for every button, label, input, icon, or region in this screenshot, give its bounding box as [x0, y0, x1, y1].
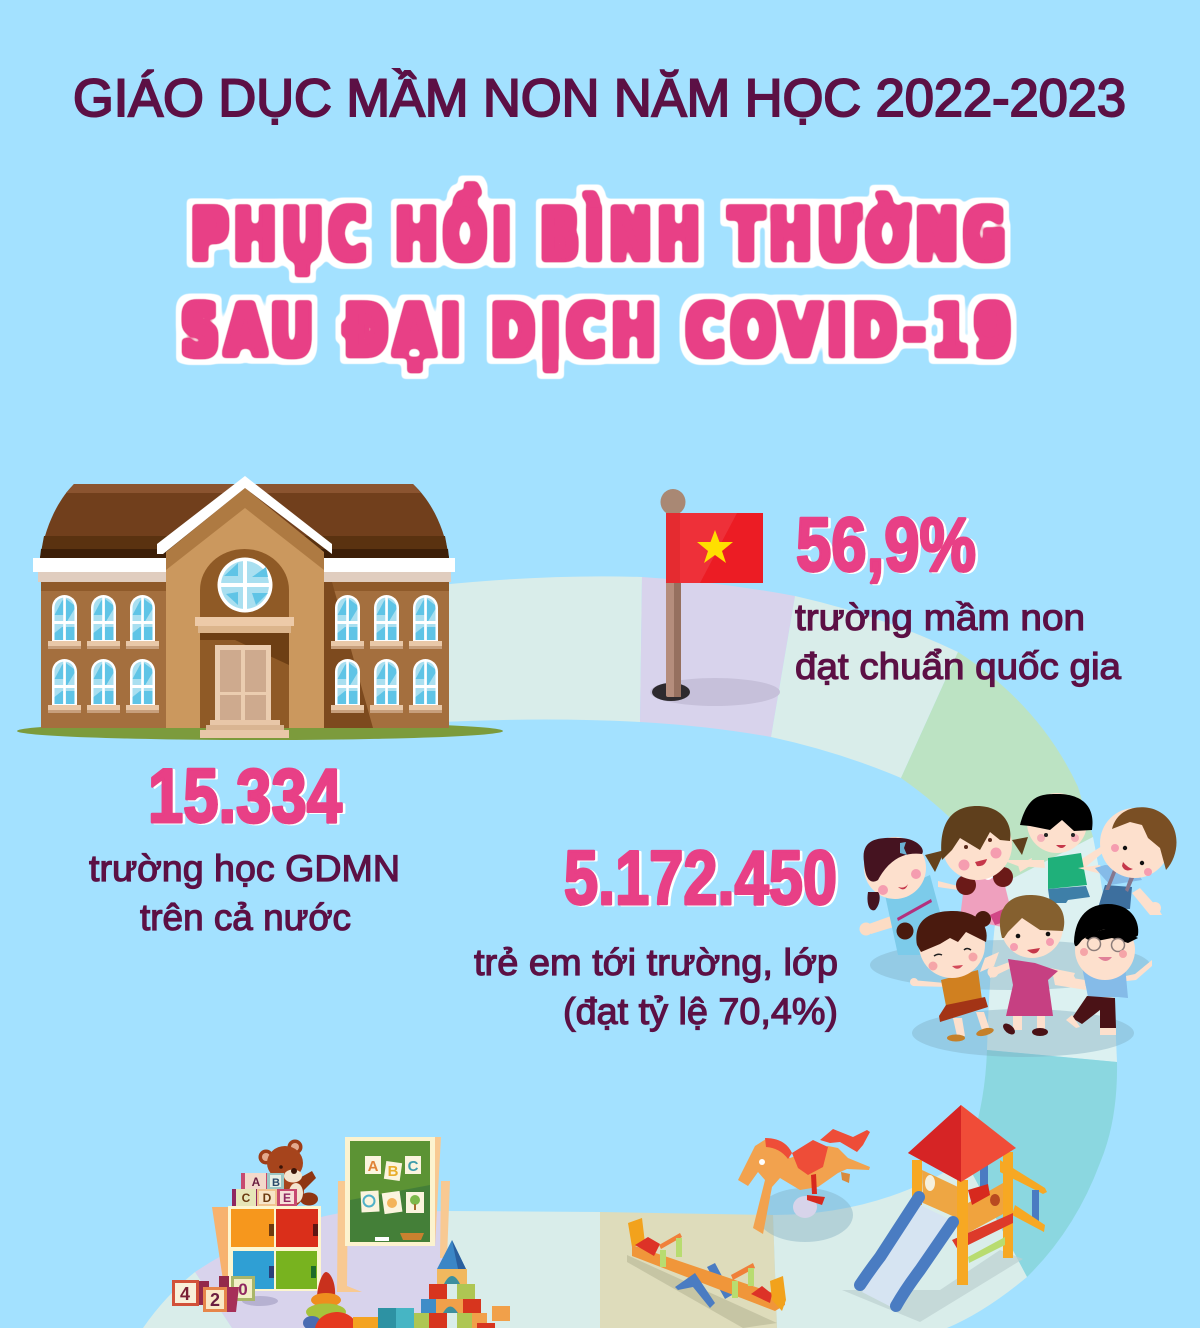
saddle strap: [811, 1174, 817, 1194]
ground shadows: [870, 940, 1150, 990]
flag shadow: [650, 678, 780, 706]
child: girl with hair buns: [896, 911, 999, 1042]
board surface: [350, 1141, 430, 1242]
slide left rail: [860, 1197, 919, 1285]
alphabet blocks: A: [252, 1175, 261, 1189]
seat back left: [628, 1218, 645, 1247]
child: boy in green shirt: [1002, 793, 1105, 903]
stat: 56,9%: [795, 503, 1121, 687]
back posts: [912, 1160, 922, 1205]
letter cards: B: [388, 1163, 399, 1180]
front post: [957, 1180, 968, 1285]
castle tower: [437, 1240, 467, 1269]
castle blocks: [429, 1284, 447, 1299]
horse body: [738, 1139, 870, 1234]
seesaw front leg: [675, 1273, 715, 1308]
spring: [793, 1196, 817, 1218]
flag knob: [660, 489, 686, 515]
roof: [40, 484, 449, 558]
pedal: [807, 1195, 825, 1205]
icon: spring rocking horse: [738, 1129, 870, 1242]
handles: [659, 1233, 682, 1249]
child: girl in magenta dress: [988, 895, 1076, 1037]
cornices: [33, 558, 166, 572]
headline: [181, 186, 1017, 372]
icon: ring pyramid toy: [303, 1272, 378, 1328]
number: 56,9%: [796, 503, 976, 588]
child: girl with bow: [860, 837, 950, 955]
alphabet blocks: C: [242, 1191, 251, 1205]
icon: vietnam flag: [650, 489, 780, 706]
horse eye: [759, 1159, 765, 1165]
board frame: [345, 1137, 435, 1246]
seats: [635, 1237, 660, 1256]
title line: GIÁO DỤC MẦM NON NĂM HỌC 2022-2023: [73, 68, 1126, 128]
saddle: [792, 1140, 828, 1175]
lintel: [195, 617, 294, 626]
child: boy with overalls: [1078, 807, 1176, 915]
slide chute: [862, 1205, 955, 1310]
label: trường học GDMN: [89, 848, 400, 889]
icon: playhouse with slide: [842, 1105, 1047, 1322]
child: boy with glasses: [1053, 904, 1152, 1035]
number blocks: 0: [238, 1280, 248, 1299]
chalk tray: [400, 1233, 424, 1240]
steps: [210, 720, 280, 725]
central gable: [166, 488, 324, 728]
icon: building blocks castle: [378, 1240, 510, 1328]
number blocks: 2: [210, 1290, 220, 1310]
icon: group of children: [860, 793, 1176, 1057]
letter cards: A: [368, 1158, 379, 1175]
icon: teddy bear with blocks: [172, 1140, 321, 1312]
playhouse shadow: [842, 1250, 1023, 1322]
windows: [48, 595, 442, 713]
number: 15.334: [148, 754, 342, 839]
seat back right: [770, 1276, 786, 1311]
flag star: [697, 530, 733, 563]
icon: easel with chalkboard: [337, 1137, 450, 1292]
number blocks: 4: [180, 1284, 190, 1304]
round window: [218, 558, 272, 612]
door: [215, 645, 271, 721]
label: trẻ em tới trường, lớp: [474, 942, 838, 983]
back rail: [1000, 1160, 1047, 1194]
stat: 15.334: [89, 754, 400, 938]
horse shadow: [757, 1188, 853, 1242]
drawings: [360, 1191, 424, 1214]
label: trường mầm non: [795, 597, 1085, 638]
seesaw shadow: [627, 1255, 777, 1328]
teal blocks: [378, 1308, 396, 1328]
slide right rail: [896, 1222, 953, 1306]
icon: school building: [17, 476, 503, 740]
stat: 15.334: trên cả nước: [140, 897, 351, 938]
beam: [632, 1245, 785, 1311]
stat: 5.172.450: [474, 836, 838, 1032]
letter cards: C: [408, 1158, 419, 1175]
horse far leg: [841, 1172, 850, 1183]
flag pole: [666, 515, 681, 697]
roof: [908, 1105, 1016, 1182]
child: girl in pink dress: [938, 806, 1032, 930]
alphabet blocks: B: [272, 1177, 280, 1189]
alphabet blocks: [232, 1173, 297, 1206]
number: 5.172.450: [564, 836, 837, 921]
arch recess: [200, 549, 289, 728]
platform: [952, 1213, 1013, 1250]
alphabet blocks: E: [283, 1191, 291, 1205]
walls: [41, 582, 166, 728]
stat: 56,9%: đạt chuẩn quốc gia: [795, 646, 1121, 687]
panel walls: [922, 1170, 958, 1218]
seesaw back leg: [707, 1263, 732, 1299]
lawn: [17, 722, 503, 740]
number blocks: [172, 1276, 278, 1312]
winding path road: [143, 576, 1117, 1328]
teddy bear: [258, 1140, 318, 1208]
horse tail: [820, 1129, 870, 1152]
right post: [1003, 1152, 1013, 1258]
alphabet blocks: D: [263, 1191, 272, 1205]
flag cloth: [666, 513, 763, 583]
flag base: [652, 683, 690, 701]
icon: seesaw: [627, 1218, 786, 1328]
letter cards: [365, 1156, 421, 1181]
easel legs: [337, 1181, 362, 1292]
cupboard: [212, 1206, 321, 1291]
stat: 5.172.450: (đạt tỷ lệ 70,4%): [563, 991, 838, 1032]
horse mane: [765, 1138, 792, 1159]
